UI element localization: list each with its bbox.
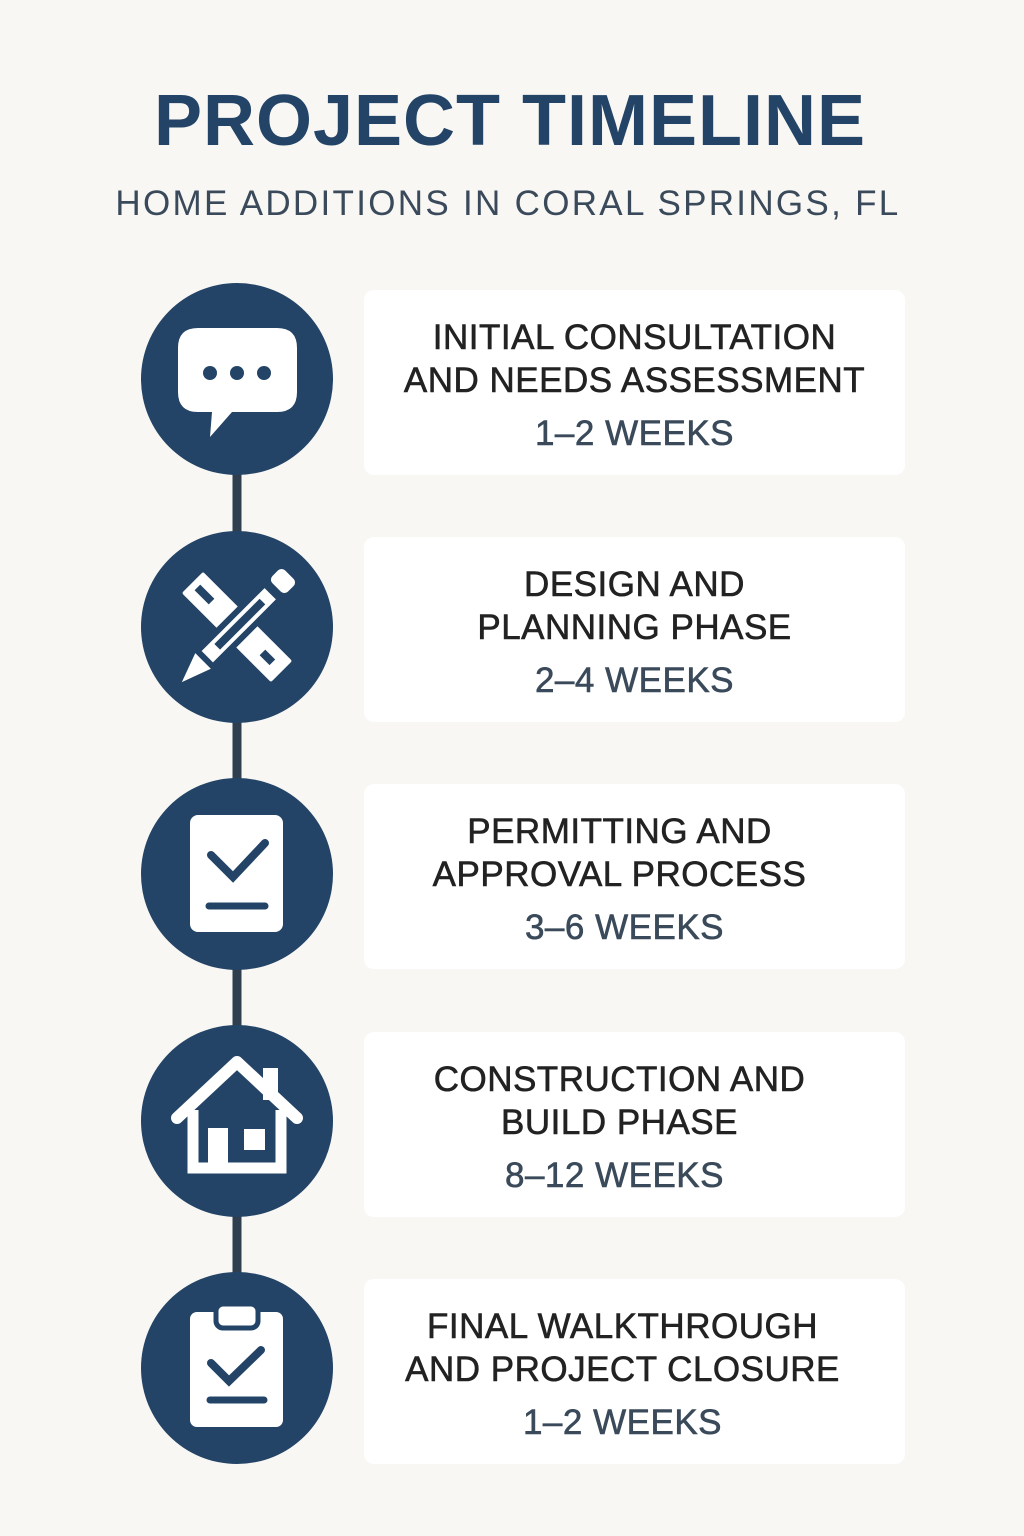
card: step 3: APPROVAL PROCESS xyxy=(433,855,806,894)
card: step 2: PLANNING PHASE xyxy=(477,608,792,647)
icon: pencil and ruler xyxy=(141,531,333,723)
card: step 3: 3–6 WEEKS xyxy=(525,908,724,947)
card: step 3 xyxy=(364,784,905,969)
card: step 5: FINAL WALKTHROUGH xyxy=(427,1307,818,1346)
card: step 1: 1–2 WEEKS xyxy=(535,414,734,453)
card: step 4: CONSTRUCTION AND xyxy=(434,1060,805,1099)
card: step 5: AND PROJECT CLOSURE xyxy=(405,1350,840,1389)
card: step 5 xyxy=(364,1279,905,1464)
card: step 2: DESIGN AND xyxy=(524,565,745,604)
card: step 2: 2–4 WEEKS xyxy=(535,661,734,700)
card: step 4: 8–12 WEEKS xyxy=(505,1156,724,1195)
card: step 2 xyxy=(364,537,905,722)
card: step 1: AND NEEDS ASSESSMENT xyxy=(404,361,865,400)
card: step 4 xyxy=(364,1032,905,1217)
icon: house xyxy=(141,1025,333,1217)
icon: document with check xyxy=(141,778,333,970)
title: PROJECT TIMELINE xyxy=(154,81,866,161)
card: step 4: BUILD PHASE xyxy=(501,1103,738,1142)
subtitle: HOME ADDITIONS IN CORAL SPRINGS, FL xyxy=(115,184,901,223)
card: step 5: 1–2 WEEKS xyxy=(523,1403,722,1442)
icon: clipboard with check xyxy=(141,1272,333,1464)
card: step 1: INITIAL CONSULTATION xyxy=(433,318,836,357)
card: step 1 xyxy=(364,290,905,475)
card: step 3: PERMITTING AND xyxy=(467,812,772,851)
icon: chat bubble xyxy=(141,283,333,475)
